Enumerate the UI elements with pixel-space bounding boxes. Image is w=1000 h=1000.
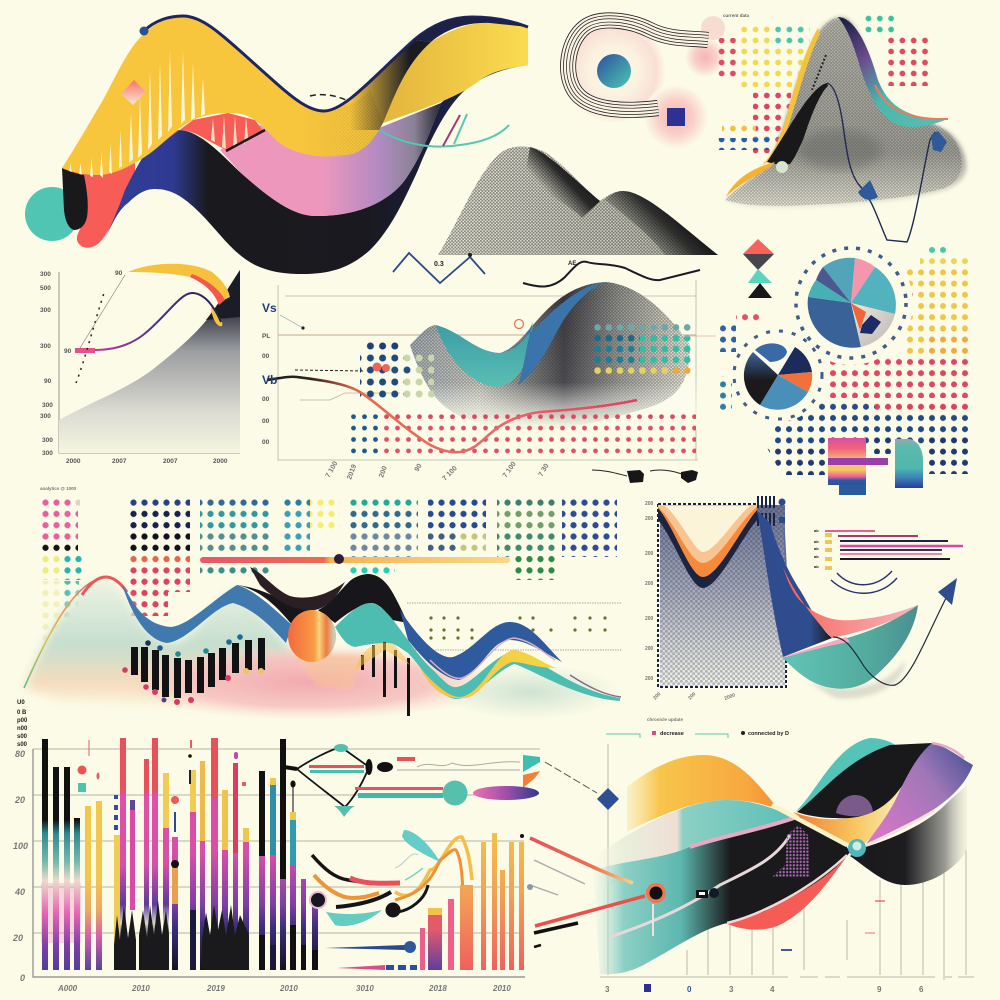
- mountain shadow two: [605, 191, 718, 255]
- coral spike block: [131, 113, 264, 165]
- tiny legend: U0: [17, 700, 25, 706]
- x labels: 0: [687, 985, 692, 994]
- gradient ball: [597, 54, 631, 88]
- bowl shadow: [805, 660, 905, 699]
- axis labels: Vs: [262, 301, 277, 315]
- small markers group 3: [190, 740, 192, 748]
- axis labels: 300: [42, 450, 53, 457]
- diamond connector: [284, 744, 393, 817]
- x labels: 2010: [492, 984, 511, 993]
- red pointer: [535, 896, 645, 926]
- black divider stroke: [226, 130, 265, 151]
- x labels: 4: [770, 985, 775, 994]
- rotated x labels: 7 30: [538, 463, 551, 478]
- red peak line: [24, 577, 106, 688]
- black squiggles: [592, 470, 698, 483]
- mountain shadow one: [525, 147, 600, 218]
- panel: bottom-left bar chart: [12, 700, 540, 993]
- coral belly: [725, 852, 850, 930]
- glow halos: [562, 19, 666, 123]
- accent strokes: [443, 115, 460, 146]
- black band right: [318, 574, 408, 623]
- panel: v-chart and bowl: [645, 496, 963, 702]
- dot field: [716, 245, 970, 475]
- thin curve: [827, 83, 935, 242]
- axis labels: 00: [262, 439, 270, 446]
- purple curve: [75, 293, 221, 350]
- legend lines: [825, 531, 963, 559]
- sparkline under mountain: AE: [568, 261, 576, 267]
- axis labels: 200: [687, 691, 697, 701]
- right ribbon: [838, 17, 945, 127]
- y labels: 80: [15, 749, 25, 759]
- white diagonal: [772, 805, 847, 845]
- panel: long wave with dots: [24, 486, 622, 720]
- wave tail: [570, 675, 621, 697]
- panel: small area chart: [40, 264, 240, 465]
- dot grids: [351, 414, 696, 454]
- axis labels: 00: [262, 353, 270, 360]
- axis labels: 2007: [163, 458, 178, 465]
- rotated x labels: 7 100: [441, 465, 459, 482]
- x labels: [605, 985, 924, 994]
- x labels: 3010: [356, 984, 374, 993]
- rotated x labels: 200: [378, 465, 389, 479]
- teal bowl: [783, 605, 918, 689]
- coral tongue: [62, 160, 135, 248]
- rotated x labels: [325, 460, 551, 482]
- teal curve accent: [380, 125, 509, 147]
- legend: [606, 717, 789, 738]
- yellow wave: [627, 755, 793, 832]
- bars group 1: [42, 739, 80, 970]
- axis labels: 200: [645, 646, 654, 652]
- black bar series: [131, 638, 265, 698]
- axis labels: 2000: [66, 458, 81, 465]
- gradient blocks: [828, 438, 923, 495]
- rotated x labels: 7 100: [502, 461, 518, 479]
- axis labels: 2000: [724, 692, 736, 702]
- x labels: 2010: [279, 984, 298, 993]
- black dash: [534, 923, 578, 933]
- thin dotted rules: [407, 603, 622, 650]
- black node circle: [309, 891, 327, 909]
- purple towers: [772, 825, 810, 877]
- axis labels: 2007: [112, 458, 127, 465]
- bars group 2: [120, 738, 169, 970]
- navy top stroke: [144, 16, 528, 111]
- black inner: [767, 83, 828, 165]
- mid mountain: [410, 282, 690, 430]
- axis labels: 90: [64, 348, 72, 355]
- black band left: [237, 585, 320, 626]
- marker icons: [78, 766, 86, 774]
- bars yellow: [85, 801, 102, 970]
- pie chart small: [744, 343, 812, 410]
- tiny legend: p00: [17, 718, 28, 724]
- teal pill row: [355, 780, 539, 806]
- peak halftone: [725, 17, 966, 208]
- y labels: 20: [14, 795, 25, 805]
- x labels: 2019: [206, 984, 225, 993]
- small olive row dots: [429, 616, 607, 640]
- y labels: 100: [13, 841, 28, 851]
- dome: [836, 795, 873, 816]
- spiky black base group 2: [114, 900, 169, 970]
- y labels: 40: [14, 887, 25, 897]
- axis labels: 200: [652, 691, 662, 701]
- halftone on yellow: [322, 90, 383, 156]
- small marks: [875, 900, 885, 902]
- pink backdrop: [41, 883, 81, 943]
- blue band left: [122, 584, 292, 643]
- axis labels: 300: [40, 343, 51, 350]
- axis labels: 200: [645, 676, 654, 682]
- x labels: 2010: [131, 984, 150, 993]
- small seed circle: [776, 161, 788, 173]
- legend: chronicle update: [647, 717, 684, 722]
- blue tabs: [858, 180, 878, 200]
- top stripes: [757, 496, 775, 526]
- dot grid: [718, 13, 931, 158]
- diamond icon: [121, 80, 146, 105]
- legend: connected by D: [748, 731, 789, 737]
- axis labels: 00: [262, 396, 270, 403]
- legend chips: [825, 533, 832, 570]
- orange ring: [514, 320, 524, 328]
- yellow halo behind drips: [355, 643, 410, 670]
- gold wedge: [793, 775, 907, 848]
- navy square: [667, 108, 685, 126]
- left yellow ribbon: [762, 28, 820, 165]
- wave halftone fills: [24, 577, 300, 712]
- grey line: [534, 860, 585, 884]
- coral sail: [783, 567, 918, 638]
- axis labels: 90: [115, 270, 123, 277]
- v bands: [658, 505, 757, 588]
- panel: center mountain: [438, 146, 718, 255]
- blue strip: [500, 282, 606, 385]
- yellow main body: [62, 17, 431, 175]
- panel: top right peak with dots: [718, 13, 966, 242]
- pink lines: [610, 835, 790, 937]
- panel: v-chart and bowl: ab: [814, 528, 819, 533]
- red line top: [530, 838, 633, 883]
- node: [646, 883, 666, 903]
- main band: [593, 817, 850, 974]
- tiny legend: s00: [17, 734, 28, 740]
- x labels: A000: [57, 984, 78, 993]
- x labels: 3: [605, 985, 610, 994]
- black lobe: [850, 785, 967, 885]
- thin line marker: [280, 315, 303, 328]
- dark halo: [798, 130, 882, 170]
- axis labels: 300: [40, 307, 51, 314]
- axis labels: [40, 270, 228, 465]
- x labels: 9: [877, 985, 882, 994]
- panel: concentric swirl: [562, 13, 750, 149]
- axis labels: [262, 301, 277, 446]
- mountain halftone body: [438, 146, 718, 255]
- triangle stack icon: [743, 239, 774, 298]
- dashed line: [295, 370, 365, 371]
- axis labels: 2000: [213, 458, 228, 465]
- pink band: [220, 103, 441, 216]
- black drip bars: [361, 642, 410, 716]
- dotted line: [76, 290, 105, 383]
- axis labels: [645, 501, 736, 702]
- navy dot: [140, 26, 148, 36]
- tiny legend: n00: [17, 726, 28, 732]
- blue diamond: [597, 788, 619, 810]
- blue dots: [778, 498, 786, 506]
- teal valley: [436, 325, 533, 387]
- teal wave: [593, 800, 795, 885]
- purple wing: [866, 743, 973, 844]
- sparkline row: [397, 755, 540, 788]
- y labels: [12, 749, 28, 983]
- rotated x labels: 2019: [346, 464, 358, 481]
- teal band: [335, 603, 620, 701]
- y labels: 20: [12, 933, 23, 943]
- teal circle: [25, 187, 79, 241]
- axis labels: 500: [40, 285, 51, 292]
- coral blobs: [372, 362, 382, 372]
- axis labels: Vb: [262, 373, 277, 387]
- dashed frame: [658, 504, 786, 687]
- black wing: [797, 743, 932, 818]
- swirl lines: [568, 20, 708, 110]
- panel: v-chart and bowl: ab: [814, 546, 819, 551]
- x labels: [57, 984, 511, 993]
- axis labels: 200: [645, 581, 654, 587]
- axis labels: 200: [645, 501, 654, 507]
- teal node: [848, 839, 866, 857]
- sphere: [288, 610, 336, 662]
- caption: analytics @ 1000: [40, 486, 77, 491]
- curved strokes cluster: [312, 837, 472, 912]
- pink upper edge: [690, 817, 797, 847]
- axis labels: 300: [40, 413, 51, 420]
- tiny legend: 0 B: [17, 710, 27, 716]
- upper right teal: [795, 738, 895, 812]
- tiny legend: s00: [17, 742, 28, 748]
- dashed arc: [310, 95, 346, 100]
- rotated x labels: 7 100: [325, 460, 340, 479]
- dashed connector: [545, 762, 597, 793]
- blue sail: [757, 510, 832, 657]
- small caption: current data: [723, 13, 750, 18]
- connector: [684, 335, 716, 337]
- small blue stick: [325, 945, 405, 950]
- panel: pie cluster with dots: [716, 239, 970, 495]
- axes: [59, 272, 240, 453]
- bars group 4: [259, 739, 318, 970]
- axis labels: 00: [262, 418, 270, 425]
- panel: v-chart and bowl: ab: [814, 564, 819, 569]
- panel: v-chart and bowl: ab: [814, 539, 819, 544]
- rotated x labels: 90: [414, 463, 424, 473]
- dots: [41, 497, 617, 641]
- arrow: [833, 598, 946, 685]
- panel: v-chart and bowl: ab: [814, 554, 819, 559]
- yellow arc: [128, 264, 230, 300]
- axis labels: 300: [42, 437, 53, 444]
- panel: middle chart: [262, 280, 716, 483]
- black tab: [62, 168, 88, 230]
- line: black to red: [267, 377, 637, 452]
- legend: decrease: [660, 731, 684, 737]
- panel: bottom-right ribbon chart: [527, 717, 974, 994]
- tiny legend: [17, 700, 28, 748]
- grey area: [59, 270, 240, 453]
- bars group 3: [190, 738, 249, 970]
- axis labels: 200: [645, 551, 654, 557]
- axis labels: 300: [42, 402, 53, 409]
- sparkline under mountain: [393, 253, 700, 287]
- line black: [523, 262, 700, 287]
- axes and grid: [278, 280, 698, 460]
- pink strip: [783, 637, 850, 658]
- label chip: [696, 890, 708, 898]
- square markers: [114, 795, 118, 830]
- red to yellow bar: [200, 557, 510, 563]
- x labels: 3: [729, 985, 734, 994]
- axis labels: 200: [645, 516, 654, 522]
- dark wedge: [340, 40, 431, 130]
- panel: large wave ribbon: [25, 16, 528, 274]
- right bars: [420, 899, 454, 970]
- white spikes: [69, 50, 205, 178]
- x labels: 2018: [428, 984, 447, 993]
- y labels: 0: [20, 973, 25, 983]
- legend arcs: [837, 571, 892, 585]
- blue band right: [400, 610, 562, 680]
- axis labels: 300: [40, 271, 51, 278]
- axis labels: 90: [44, 378, 52, 385]
- pie chart large: [808, 258, 896, 348]
- brown cap: [250, 567, 345, 610]
- axis labels: PL: [262, 333, 270, 340]
- yellow band right: [420, 650, 557, 698]
- halftone rect: [660, 505, 785, 686]
- x labels: 6: [919, 985, 924, 994]
- ring cutouts and rings: [789, 241, 913, 365]
- bar dot markers: [122, 634, 264, 705]
- pie navy blob: [860, 315, 881, 334]
- labels: 0.3: [434, 261, 444, 268]
- verticals and axis: [600, 744, 974, 980]
- axis labels: 200: [645, 616, 654, 622]
- navy and black band: [103, 27, 528, 274]
- grid and axes: [33, 749, 540, 977]
- line navy: [393, 253, 485, 283]
- yellow right tail: [383, 23, 528, 123]
